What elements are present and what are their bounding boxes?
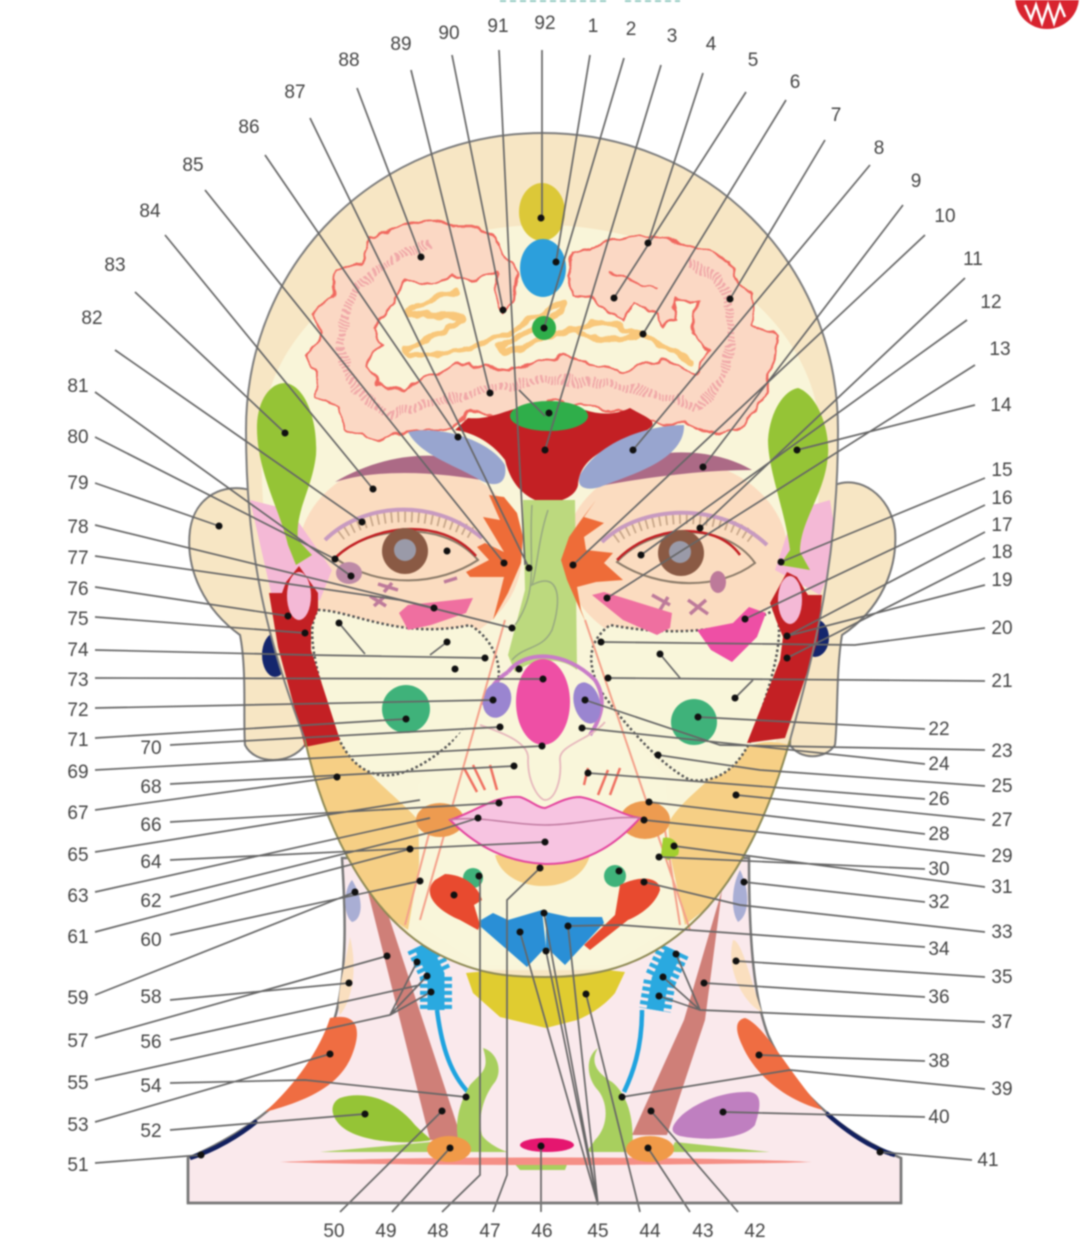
chart base outline (188, 1158, 901, 1203)
blue-gray brow zones (408, 425, 684, 489)
number labels: 39 (991, 1079, 1013, 1100)
yellow chin crescent (466, 953, 625, 1028)
leader lines (95, 50, 985, 1212)
clavicle line (280, 1158, 812, 1165)
orange nerve shapes (466, 495, 623, 623)
eyebrows (335, 452, 752, 488)
number labels: 29 (991, 846, 1013, 867)
number labels: 72 (67, 700, 89, 721)
philtrum red marks (464, 765, 620, 795)
temple green teardrops (257, 383, 828, 570)
number labels: 88 (338, 50, 360, 71)
number labels: 71 (67, 730, 89, 751)
neck and shoulders (188, 858, 901, 1203)
number labels: 66 (140, 815, 162, 836)
number labels: 63 (67, 886, 89, 907)
number labels: 51 (67, 1155, 89, 1176)
lips (450, 797, 640, 864)
marker dots (198, 214, 884, 1158)
yellow forehead spot (519, 183, 565, 241)
number labels: 37 (991, 1012, 1013, 1033)
number labels: 81 (67, 376, 89, 397)
number labels: 87 (284, 82, 306, 103)
number labels: 38 (928, 1051, 950, 1072)
number labels: 80 (67, 427, 89, 448)
blue forehead spot (520, 239, 566, 297)
number labels: 55 (67, 1073, 89, 1094)
number labels: 90 (438, 23, 460, 44)
cheek green circles (382, 685, 717, 745)
number labels: 89 (390, 34, 412, 55)
number labels: 6 (790, 72, 800, 93)
lower face cream (312, 610, 499, 775)
number labels: 13 (989, 339, 1011, 360)
neck side peach bands (339, 937, 762, 1015)
number labels: 47 (479, 1221, 501, 1242)
number labels: 58 (140, 987, 162, 1008)
mouth corners (416, 801, 670, 839)
number labels: 26 (928, 789, 950, 810)
right eye (602, 513, 767, 583)
number labels: 35 (991, 967, 1013, 988)
number labels: 10 (934, 206, 956, 227)
neck muscles (367, 888, 722, 1140)
number labels: 57 (67, 1031, 89, 1052)
number labels: 53 (67, 1115, 89, 1136)
small intestine (405, 290, 692, 362)
number labels: 52 (140, 1121, 162, 1142)
number labels: 1 (588, 16, 598, 37)
head outline (246, 133, 838, 977)
number labels: 5 (748, 50, 758, 71)
number labels: 20 (991, 618, 1013, 639)
navy shoulder arcs (190, 1113, 895, 1158)
number labels: 21 (991, 671, 1013, 692)
blue chin organs (481, 910, 604, 967)
number labels: 43 (692, 1221, 714, 1242)
neck orange patches (265, 1017, 823, 1112)
number labels: 75 (67, 609, 89, 630)
chin orange arc (495, 855, 590, 886)
number labels: 8 (874, 138, 884, 159)
left eye (325, 510, 482, 580)
number labels: 30 (928, 859, 950, 880)
green neck gland (332, 1095, 430, 1142)
number labels: 36 (928, 987, 950, 1008)
number labels: 7 (831, 105, 841, 126)
number labels: 56 (140, 1032, 162, 1053)
right ear lobe (801, 619, 829, 657)
number labels: 54 (140, 1076, 162, 1097)
jaw orange left (307, 740, 420, 930)
left ear (189, 488, 305, 760)
number labels: 84 (139, 201, 161, 222)
number labels: 76 (67, 579, 89, 600)
head and face zones (246, 133, 838, 977)
number labels: 60 (140, 930, 162, 951)
number labels: 33 (991, 922, 1013, 943)
colon and intestines (307, 220, 776, 442)
green glabella oval (510, 401, 588, 431)
number labels: 85 (182, 155, 204, 176)
number labels: 68 (140, 777, 162, 798)
lime side mark (661, 837, 679, 860)
nose green strip (508, 500, 577, 672)
number labels: 61 (67, 927, 89, 948)
magenta right cheek (697, 607, 766, 662)
eye peach zones (302, 472, 522, 630)
number labels: 3 (667, 26, 677, 47)
number labels: 70 (140, 738, 162, 759)
left ear lobe (262, 633, 288, 677)
number labels: 12 (980, 292, 1002, 313)
number labels: 67 (67, 803, 89, 824)
pink throat oval (520, 1138, 574, 1152)
number labels: 18 (991, 542, 1013, 563)
number labels: 9 (911, 171, 921, 192)
nose stomach sketch (512, 505, 557, 660)
number labels: 77 (67, 548, 89, 569)
colon hatching (341, 245, 731, 413)
number labels: 32 (928, 892, 950, 913)
number labels: 34 (928, 939, 950, 960)
forehead light zone (262, 225, 820, 970)
number labels: 59 (67, 988, 89, 1009)
number labels: 86 (238, 117, 260, 138)
number labels: 79 (67, 473, 89, 494)
number labels: 17 (991, 515, 1013, 536)
number labels: 49 (375, 1221, 397, 1242)
number labels: 28 (928, 824, 950, 845)
number labels: 25 (991, 776, 1013, 797)
lymph nodes (422, 945, 674, 1092)
number labels: 64 (140, 852, 162, 873)
thyroid lime shapes (320, 1048, 770, 1170)
jaw red bands and ear loops (269, 566, 822, 747)
number labels: 2 (626, 19, 636, 40)
number labels: 69 (67, 762, 89, 783)
number labels: 42 (744, 1221, 766, 1242)
number labels: 19 (991, 570, 1013, 591)
number labels: 82 (81, 308, 103, 329)
number labels: 46 (531, 1221, 553, 1242)
number labels: 65 (67, 845, 89, 866)
number labels: 44 (639, 1221, 661, 1242)
number labels: 92 (534, 13, 556, 34)
logo badge (1015, 0, 1079, 29)
number labels: 23 (991, 741, 1013, 762)
number labels: 14 (990, 395, 1012, 416)
number labels: 91 (487, 16, 509, 37)
number labels: 74 (67, 640, 89, 661)
number labels: 11 (963, 249, 983, 270)
number labels: 83 (104, 255, 126, 276)
pink temples (250, 500, 838, 610)
number labels: 62 (140, 891, 162, 912)
right ear (790, 482, 895, 756)
number labels: 50 (323, 1221, 345, 1242)
nose (479, 656, 605, 800)
number labels: 15 (991, 460, 1013, 481)
top cropped heading remnant (500, 0, 680, 2)
number labels: 73 (67, 670, 89, 691)
number labels: 24 (928, 754, 950, 775)
clavicle orange nodes (427, 1136, 674, 1162)
number labels: 16 (991, 488, 1013, 509)
red glabella zone (455, 408, 653, 503)
jaw orange right (668, 741, 788, 926)
under-eye marks (336, 562, 726, 614)
number labels: 27 (991, 810, 1013, 831)
pink under-eye patches (399, 592, 672, 635)
green forehead spot (532, 316, 556, 340)
orange vertical nasal lines (405, 620, 690, 930)
neck side strips (345, 870, 747, 922)
red chin organs (430, 874, 660, 950)
number labels: 41 (977, 1150, 999, 1171)
number labels: 22 (928, 719, 950, 740)
number labels: 31 (991, 877, 1013, 898)
number labels: 78 (67, 517, 89, 538)
number labels: 4 (706, 34, 717, 55)
green chin spots (463, 865, 626, 888)
number labels: 48 (427, 1221, 449, 1242)
number labels: 40 (928, 1107, 950, 1128)
number labels: 45 (587, 1221, 609, 1242)
purple neck gland (673, 1092, 759, 1139)
